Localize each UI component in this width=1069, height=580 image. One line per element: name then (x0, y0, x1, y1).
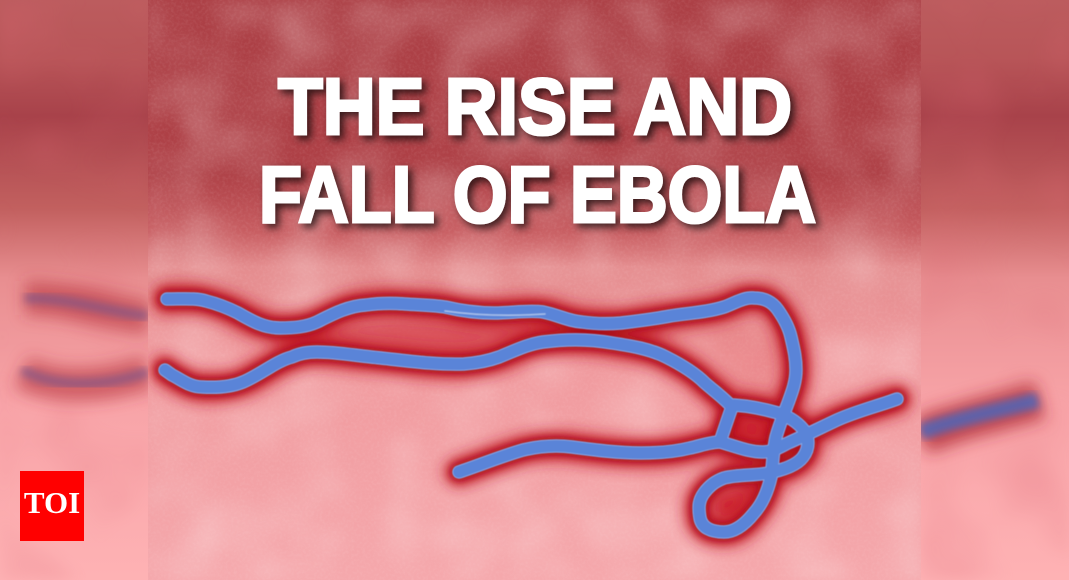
TOI logo (20, 471, 84, 541)
left blurred side panel (0, 0, 148, 580)
virus filament (165, 298, 897, 532)
main micrograph panel (148, 0, 921, 580)
title (259, 62, 816, 239)
TOI logo: TOI (24, 485, 80, 520)
blurred virus strands at left (22, 298, 148, 385)
title line 1: THE RISE AND (278, 62, 792, 151)
red halo around virus (165, 298, 897, 532)
blurred virus strand at right (921, 400, 1040, 436)
right blurred side panel (921, 0, 1069, 580)
title line 2: FALL OF EBOLA (259, 150, 816, 239)
dark red enclosed regions (285, 319, 790, 525)
